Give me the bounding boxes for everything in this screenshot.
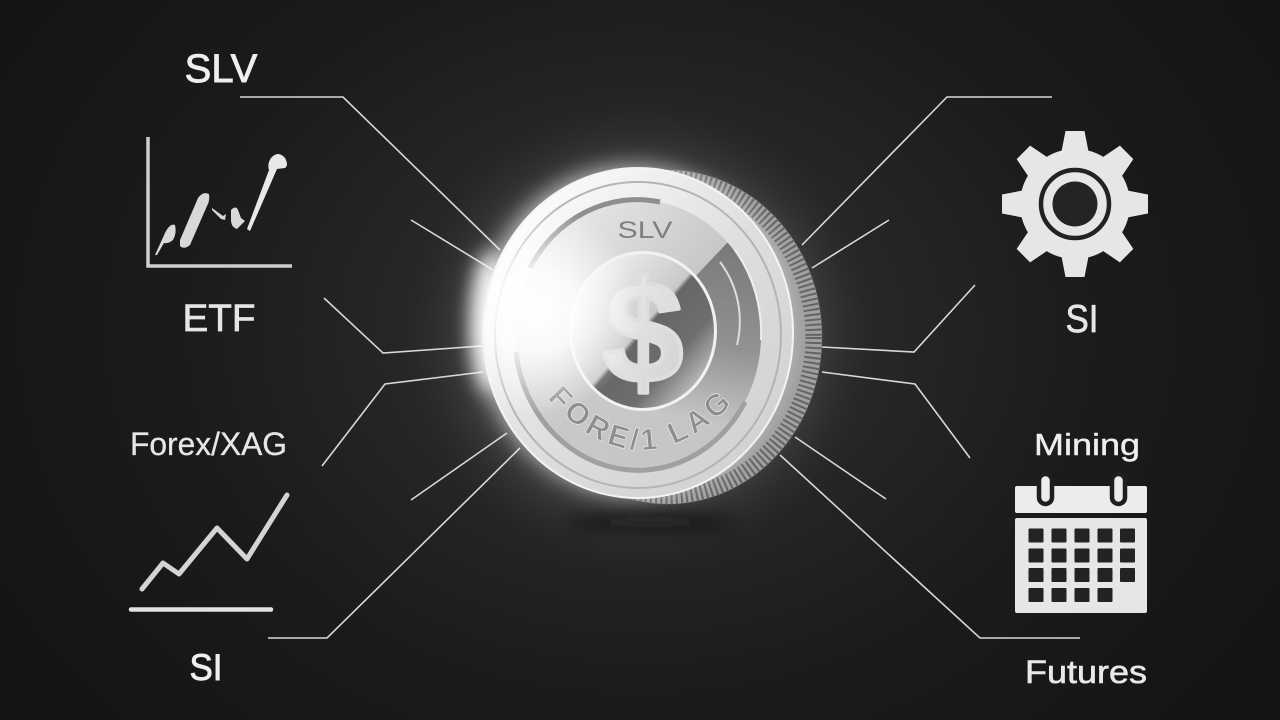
- coin shadow: [565, 515, 735, 529]
- coin halo: [405, 100, 875, 570]
- icon: gear: [1002, 131, 1148, 277]
- connector: SLV label to coin: [240, 97, 500, 250]
- coin inner field: [524, 202, 761, 468]
- connector: line chart to coin: [411, 433, 507, 500]
- coin reeded edge: [514, 170, 822, 504]
- connector: SI label to coin: [268, 448, 520, 638]
- coin highlight: [484, 214, 628, 408]
- label: Futures: Futures: [1025, 654, 1147, 690]
- connector: ETF to coin: [324, 298, 482, 353]
- label: SLV: SLV: [185, 47, 258, 91]
- label: ETF: ETF: [182, 298, 256, 340]
- icon: line chart: [131, 495, 287, 610]
- dollar sign: $: [603, 251, 683, 413]
- connector: Futures to coin: [780, 455, 1080, 638]
- connector: gear to coin: [822, 285, 975, 352]
- connector: Mining to coin: [822, 372, 970, 458]
- label: Mining: Mining: [1034, 427, 1140, 462]
- connector: chart to coin: [411, 220, 493, 270]
- coin face rim: [482, 167, 794, 499]
- coin centre disc: [569, 251, 717, 411]
- icon: ETF price chart: [148, 137, 292, 266]
- coin bottom lettering: FORE/1 LAG: [548, 385, 729, 450]
- silver coin: [456, 152, 822, 508]
- icon: calendar: [1015, 474, 1147, 613]
- connector: lower right short: [795, 437, 886, 499]
- label: SI right: SI: [1066, 298, 1098, 341]
- label: SI left: SI: [190, 647, 222, 688]
- connector: top right to coin: [802, 97, 1052, 245]
- coin top lettering: SLV: [618, 217, 672, 244]
- connector lines: [240, 97, 1080, 638]
- coin outer glow: [472, 165, 787, 495]
- connector: Forex/XAG to coin: [322, 372, 483, 466]
- label: Forex/XAG: Forex/XAG: [130, 426, 287, 462]
- connector: upper right short: [812, 220, 889, 268]
- coin groove arcs: [516, 200, 761, 470]
